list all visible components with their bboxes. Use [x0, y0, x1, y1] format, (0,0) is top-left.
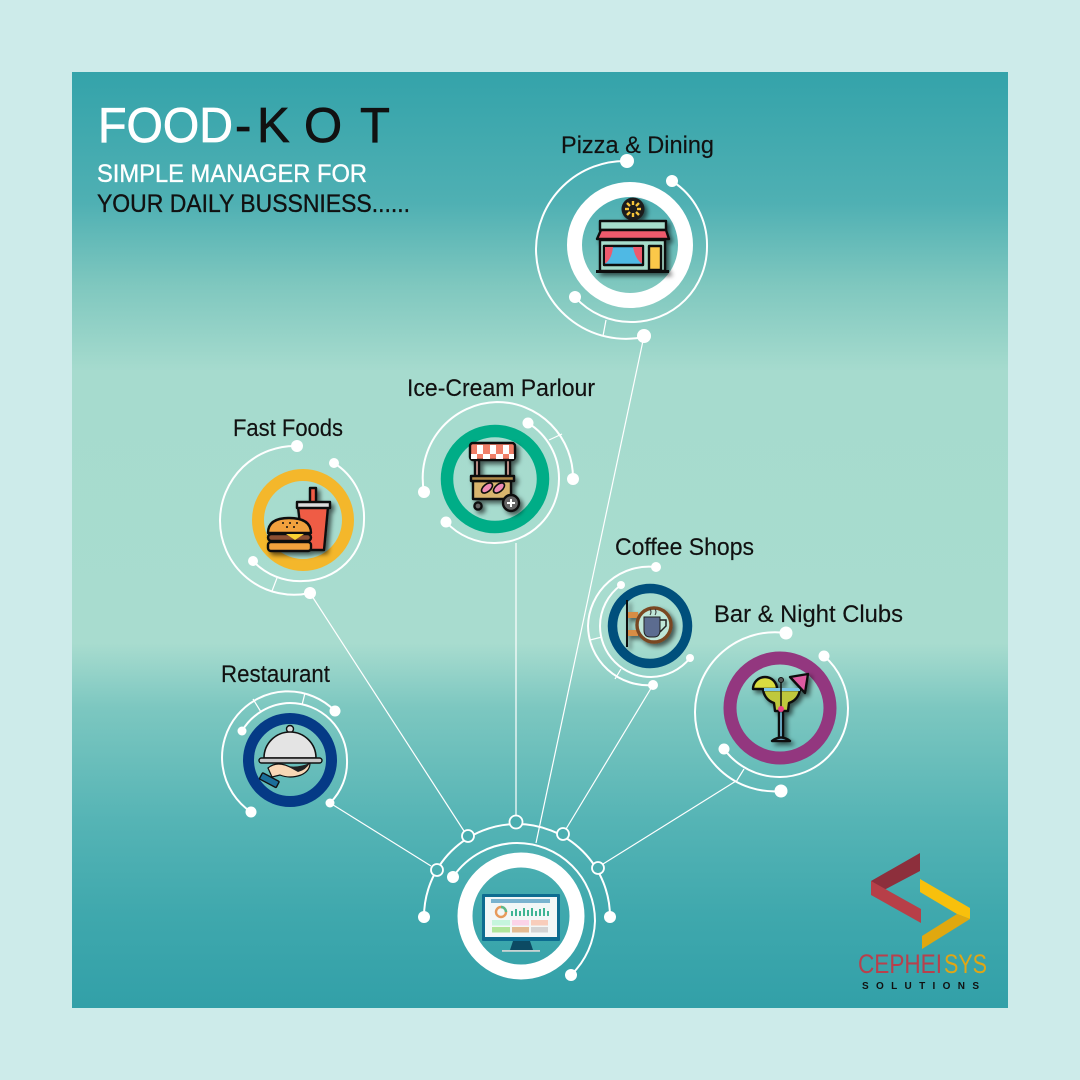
node: Restaurant — [221, 661, 347, 818]
icon: dashboard monitor — [482, 894, 560, 952]
central hub — [418, 816, 616, 981]
inner arc — [453, 843, 595, 975]
title: -K O T: O — [304, 99, 342, 153]
label: Fast Foods: Fast Foods — [233, 415, 343, 442]
orbit arcs — [418, 402, 579, 543]
title: -K O T: K — [257, 99, 290, 153]
title: FOOD: FOOD — [98, 99, 233, 153]
ring — [447, 431, 543, 527]
ring — [465, 860, 577, 972]
node: Fast Foods — [220, 415, 364, 599]
label: Bar & Night Clubs: Bar & Night Clubs — [714, 601, 903, 628]
label: Pizza & Dining: Pizza & Dining — [561, 132, 714, 159]
title: -K O T: T — [360, 99, 390, 153]
node: Bar & Night Clubs — [695, 601, 903, 798]
icon: cocktail glass — [753, 674, 808, 741]
node: Pizza & Dining — [536, 132, 714, 343]
ring — [574, 190, 686, 300]
orbit arcs — [536, 154, 707, 343]
orbit arcs — [695, 626, 848, 798]
ring — [730, 658, 830, 758]
main gradient panel — [72, 72, 1008, 1008]
title: -K O T: - — [235, 99, 251, 153]
title block — [97, 99, 410, 218]
subtitle line 2: YOUR DAILY BUSSNIESS...... — [97, 190, 410, 218]
label: Ice-Cream Parlour: Ice-Cream Parlour — [407, 375, 595, 402]
icon: cloche and hand — [259, 726, 322, 788]
ring — [248, 718, 332, 802]
wordmark: SYS: SYS — [944, 949, 987, 979]
ring — [612, 588, 688, 664]
icon: burger and drink — [268, 488, 330, 551]
orbit arcs — [220, 440, 364, 599]
connector nodes — [431, 816, 604, 876]
subtitle line 1: SIMPLE MANAGER FOR — [97, 160, 367, 188]
orbit arcs — [222, 691, 347, 818]
node: Ice-Cream Parlour — [407, 375, 595, 543]
ring — [258, 475, 348, 565]
node: Coffee Shops — [588, 534, 754, 690]
connector lines to central hub — [310, 336, 736, 866]
label: Coffee Shops: Coffee Shops — [615, 534, 754, 561]
logo: Cepheisys Solutions — [858, 853, 987, 992]
icon: hanging coffee sign — [626, 600, 671, 647]
tagline: SOLUTIONS — [862, 981, 979, 992]
outer arc — [424, 824, 610, 917]
wordmark: CEPHEI: CEPHEI — [858, 949, 942, 979]
arc end dots — [418, 871, 616, 981]
logo mark — [871, 853, 970, 949]
title: -K O T — [235, 99, 390, 153]
icon: storefront with pizza sign — [596, 198, 669, 273]
orbit arcs — [588, 562, 694, 690]
icon: ice-cream cart — [470, 443, 519, 511]
label: Restaurant: Restaurant — [221, 661, 330, 688]
